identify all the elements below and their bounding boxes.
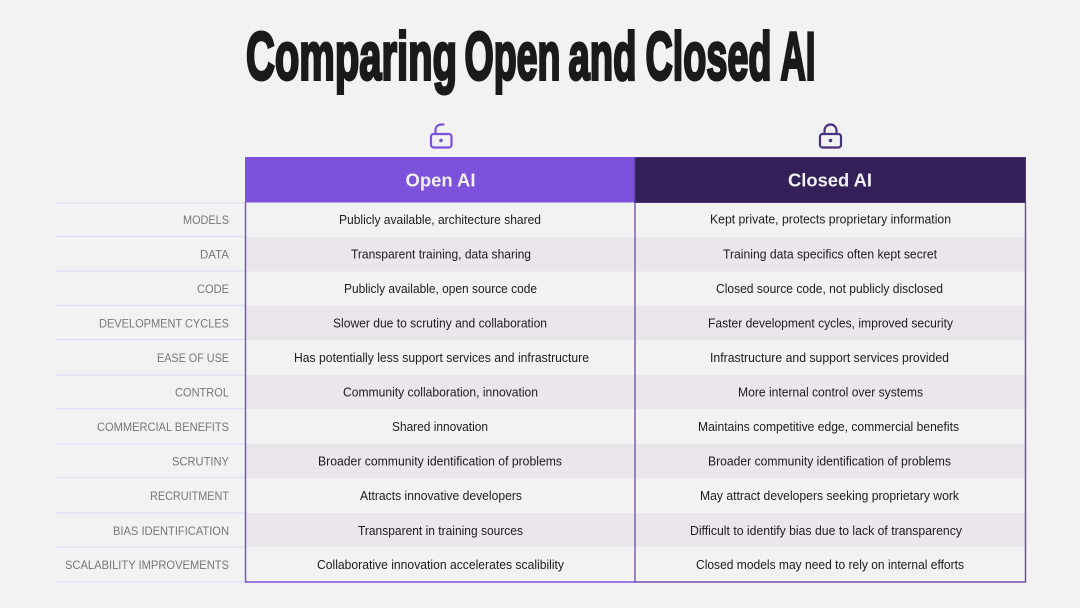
Open AI column text: Attracts innovative developers xyxy=(360,489,522,503)
Closed AI column text: Kept private, protects proprietary information xyxy=(710,212,951,226)
title: Open xyxy=(464,19,560,95)
Open AI column text: Community collaboration, innovation xyxy=(343,386,538,400)
table frame xyxy=(245,202,1026,582)
Closed AI column text: Training data specifics often kept secret xyxy=(723,248,938,262)
header: Open AI xyxy=(245,157,635,202)
row labels xyxy=(65,213,230,572)
header: Closed AI: Closed AI xyxy=(788,170,872,190)
Open AI column text: Slower due to scrutiny and collaboration xyxy=(333,316,547,330)
row labels: DATA xyxy=(200,248,229,262)
row labels: CODE xyxy=(197,282,229,296)
Closed AI column text: May attract developers seeking proprietary work xyxy=(700,489,960,503)
row label guide lines xyxy=(55,203,245,582)
Open AI column text: Has potentially less support services and infrastructure xyxy=(294,351,589,365)
row labels: SCRUTINY xyxy=(172,454,229,468)
row labels: DEVELOPMENT CYCLES xyxy=(99,316,229,330)
title: Comparing xyxy=(246,19,457,95)
row labels: BIAS IDENTIFICATION xyxy=(113,524,229,538)
Open AI column text xyxy=(294,213,589,572)
header: Open AI: Open AI xyxy=(406,170,476,190)
Closed AI column text: Closed source code, not publicly disclosed xyxy=(716,282,943,296)
Closed AI column text xyxy=(690,212,964,572)
Closed AI column text: Closed models may need to rely on internal efforts xyxy=(696,558,964,572)
icon: closed padlock xyxy=(820,124,841,148)
header: Closed AI xyxy=(635,157,1026,202)
Closed AI column text: More internal control over systems xyxy=(738,386,923,400)
Open AI column text: Transparent in training sources xyxy=(358,524,523,538)
row labels: CONTROL xyxy=(175,386,229,400)
title: and xyxy=(568,19,636,95)
title xyxy=(246,19,816,95)
Closed AI column text: Maintains competitive edge, commercial benefits xyxy=(698,420,959,434)
Open AI column text: Shared innovation xyxy=(392,420,488,434)
Closed AI column text: Difficult to identify bias due to lack of transparency xyxy=(690,524,963,538)
Closed AI column text: Faster development cycles, improved security xyxy=(708,316,954,330)
title: Closed xyxy=(646,19,772,95)
Open AI column text: Collaborative innovation accelerates scalibility xyxy=(317,558,565,572)
row labels: RECRUITMENT xyxy=(150,489,230,503)
Closed AI column text: Infrastructure and support services provided xyxy=(710,351,949,365)
icon: open padlock xyxy=(431,124,452,148)
Open AI column text: Publicly available, open source code xyxy=(344,282,537,296)
row labels: COMMERCIAL BENEFITS xyxy=(97,420,229,434)
row labels: EASE OF USE xyxy=(157,351,229,365)
row labels: SCALABILITY IMPROVEMENTS xyxy=(65,558,229,572)
Open AI column text: Transparent training, data sharing xyxy=(351,248,531,262)
Open AI column text: Publicly available, architecture shared xyxy=(339,213,541,227)
shaded alternate rows xyxy=(246,237,1025,547)
row labels: MODELS xyxy=(183,213,229,227)
Closed AI column text: Broader community identification of problems xyxy=(708,454,951,468)
title: AI xyxy=(780,19,816,95)
Open AI column text: Broader community identification of problems xyxy=(318,454,562,468)
